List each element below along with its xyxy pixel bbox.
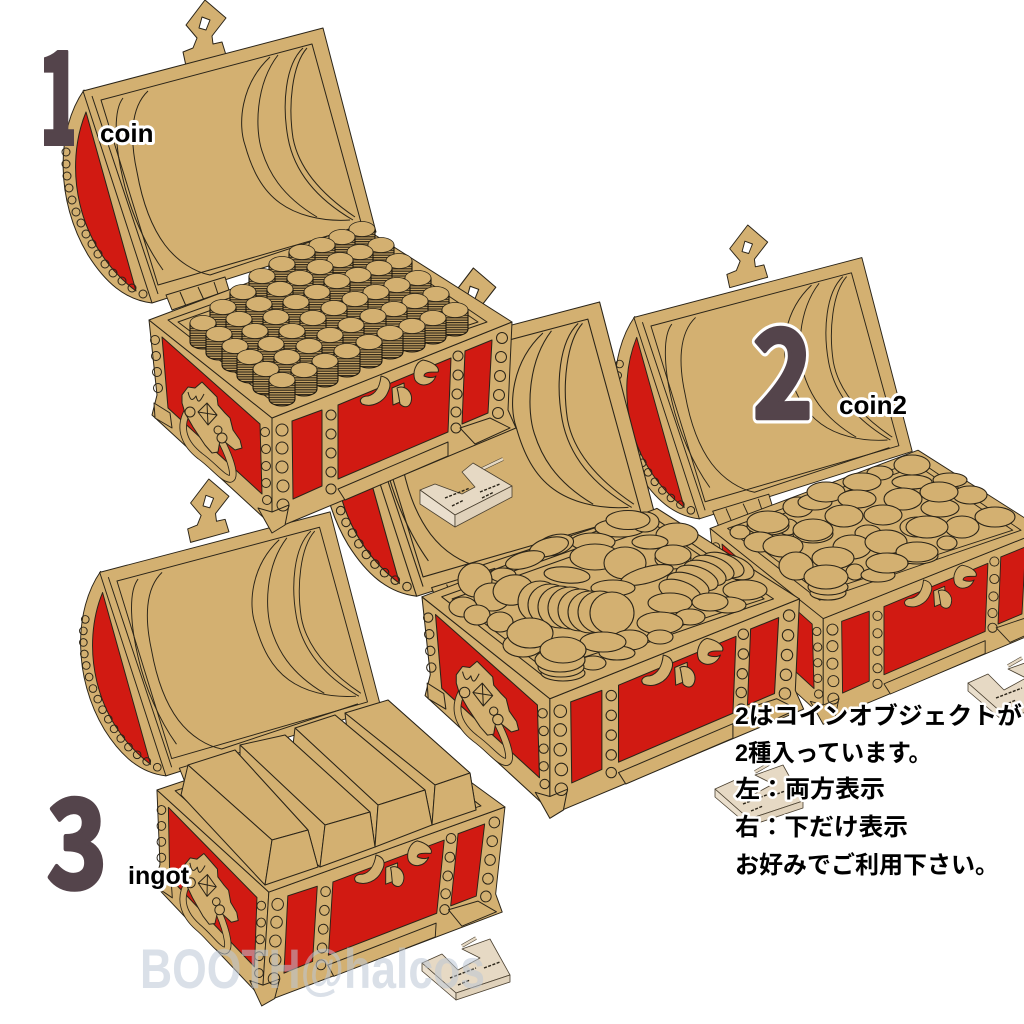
hasp of chest 2 [727, 225, 768, 288]
note text: 2はコインオブジェクトが [735, 702, 1022, 730]
label ingot: ingot [128, 862, 190, 890]
note text: 左：両方表示 [735, 776, 885, 803]
chest 1: stacked coin chest [62, 0, 516, 533]
padlock piece on center lid [420, 459, 512, 527]
body of center chest [422, 508, 804, 818]
label coin: coin [100, 118, 153, 148]
number 1: 1 [33, 0, 85, 183]
coin stacks grid [190, 222, 468, 406]
padlock piece at bottom [422, 938, 510, 1000]
chest 2: coin2 chest at right [614, 225, 1024, 724]
chest center: coin pile chest [320, 268, 804, 818]
watermark: BOOTH@halcos [140, 937, 485, 1000]
flat coin pile of chest 2 [730, 455, 1015, 600]
note text: 2種入っています。 [735, 740, 932, 767]
hasp of center chest [450, 268, 496, 339]
number 2: 2 [753, 279, 813, 453]
lid of chest 1 [62, 28, 376, 310]
label coin2: coin2 [839, 390, 907, 420]
gold ingots [181, 700, 476, 885]
number 2: 2 [753, 279, 813, 453]
padlock piece under note text [715, 764, 803, 826]
lid of center chest [320, 302, 656, 604]
note text: 右：下だけ表示 [735, 814, 908, 841]
body of chest 2 [710, 450, 1024, 724]
body of chest 3 [144, 706, 514, 1016]
lid of chest 2 [614, 258, 912, 526]
note text: お好みでご利用下さい。 [735, 851, 999, 879]
loose coin pile of center chest [449, 510, 767, 681]
note text [735, 702, 1022, 879]
body of chest 1 [149, 235, 516, 533]
hasp of chest 1 [183, 0, 226, 66]
chest 3: ingot chest [80, 479, 514, 1016]
hasp of chest 3 [188, 479, 229, 542]
padlock piece near right edge [968, 658, 1024, 720]
number 3: 3 [47, 749, 107, 923]
lid of chest 3 [80, 512, 381, 783]
